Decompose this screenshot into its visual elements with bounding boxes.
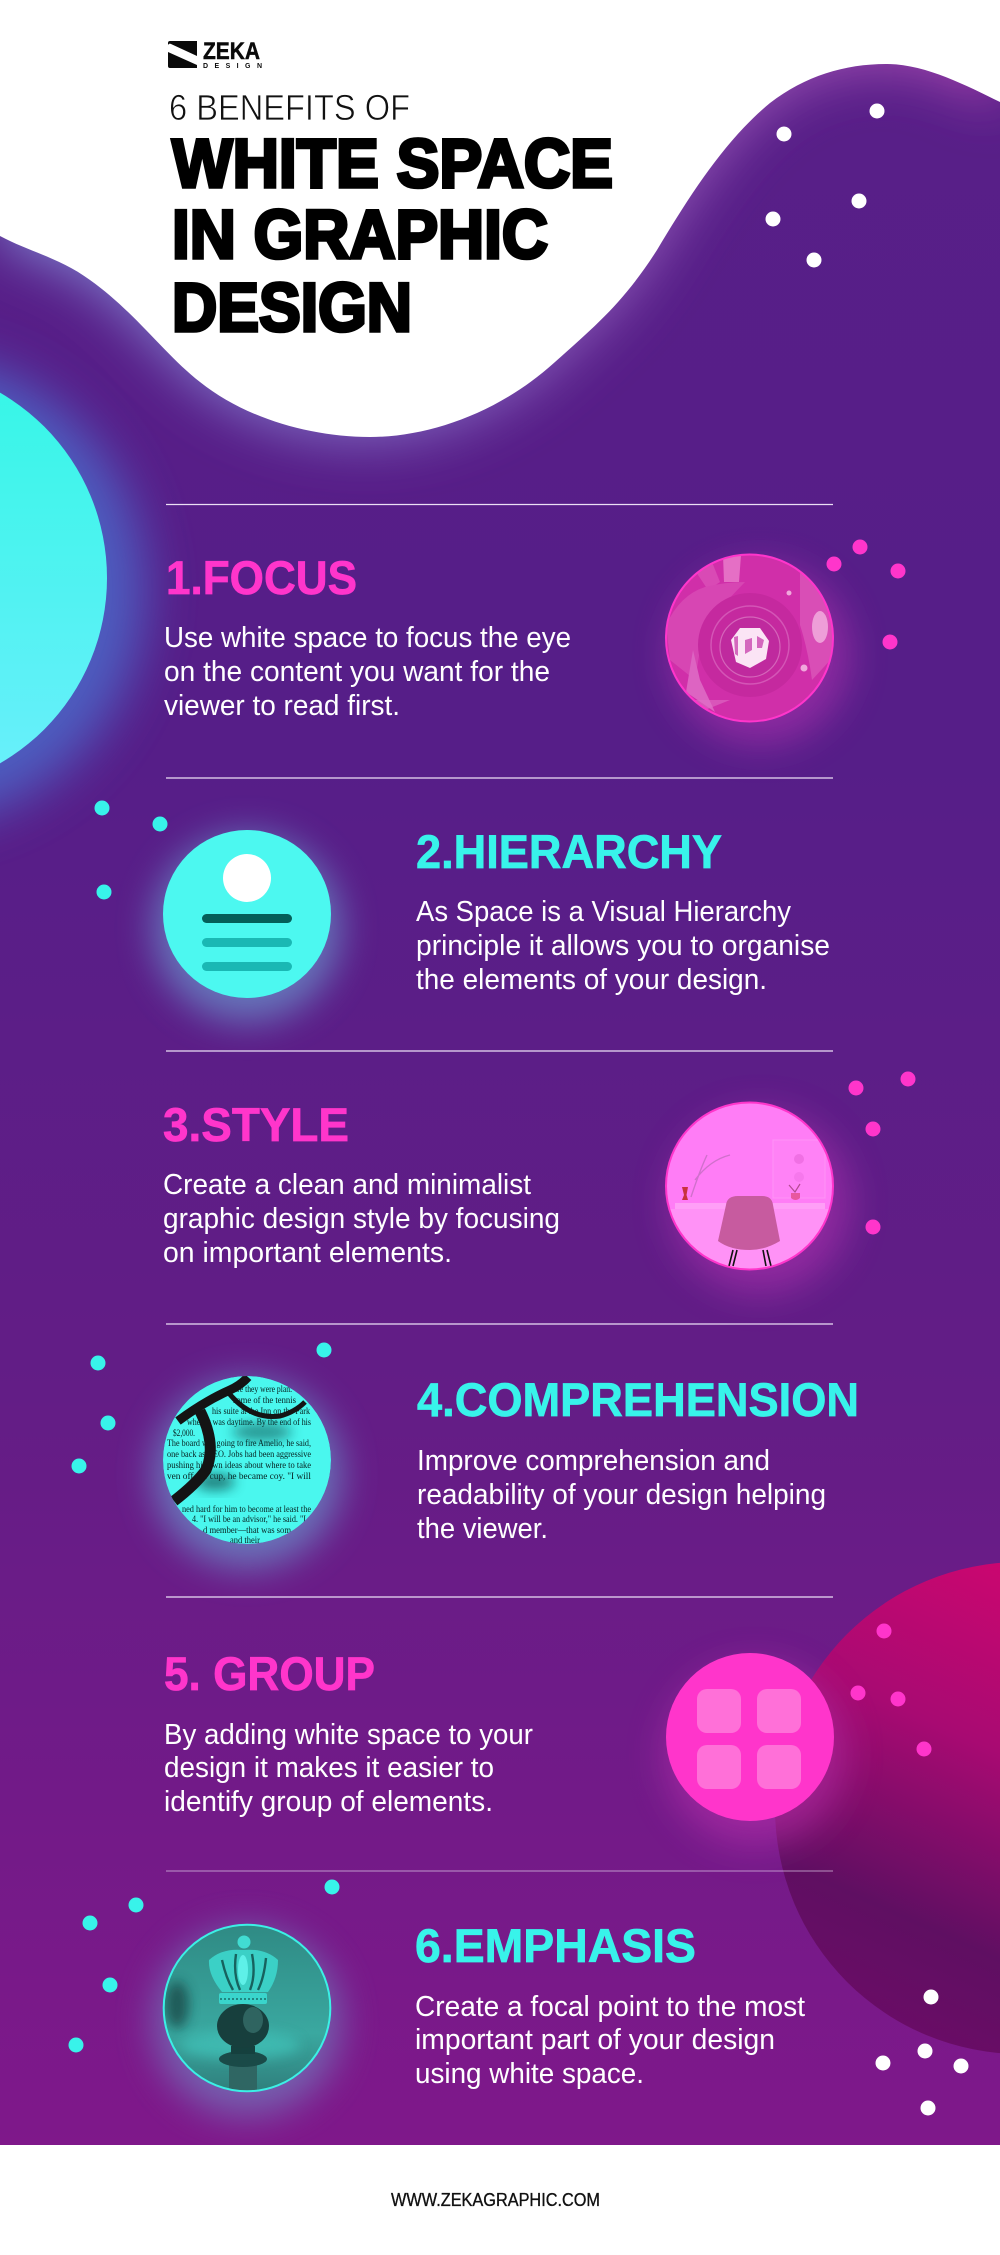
text: style description: Create a clean and minimalist [163, 1169, 531, 1201]
text: group description: By adding white space to your [164, 1719, 533, 1751]
icon: book and glasses photo: ven off the cup, he became coy. "I will [167, 1471, 312, 1481]
dots: pink 5 [850, 1624, 932, 1756]
icon: minimalist chair photo [665, 1102, 835, 1274]
text: emphasis description: important part of your design [415, 2024, 775, 2056]
text: focus description: Use white space to focus the eye [164, 622, 571, 654]
logo wordmark: ZEKA [203, 38, 260, 65]
icon: book and glasses photo: The board was going to fire Amelio, he said, [167, 1438, 311, 1448]
icon: book and glasses photo: $2,000. [173, 1428, 195, 1438]
title kicker: 6 BENEFITS OF [169, 87, 410, 128]
icon: grouped tiles [666, 1653, 834, 1821]
icon: book and glasses photo: when it was daytime. By the end of his [187, 1417, 311, 1427]
panel: 1 focus [164, 540, 906, 745]
icon ring: chair [666, 1102, 833, 1270]
dots: white bottom [876, 1990, 968, 2116]
text: emphasis description: using white space. [415, 2058, 644, 2090]
icon ring: lens [666, 554, 833, 722]
text: comprehension description: readability of your design helping [417, 1479, 826, 1511]
panel: 6 emphasis [68, 1880, 805, 2116]
text: style description: graphic design style by focusing [163, 1203, 560, 1235]
icon: book and glasses photo: and their [230, 1535, 260, 1545]
footer band [0, 2145, 1000, 2255]
title line 3: DESIGN [172, 269, 412, 346]
glow: group [665, 1665, 845, 1845]
panel: 3 style [163, 1072, 916, 1293]
text: style description [163, 1169, 560, 1269]
text: focus description: on the content you want for the [164, 656, 550, 688]
decorative cyan circle [0, 364, 107, 792]
title line 1: WHITE SPACE [172, 125, 613, 202]
text: focus description: viewer to read first. [164, 690, 400, 722]
text: comprehension description: Improve comprehension and [417, 1445, 770, 1477]
text: hierarchy description: the elements of your design. [416, 964, 767, 996]
glow: book [153, 1380, 341, 1568]
text: style description: on important elements. [163, 1237, 452, 1269]
icon: book and glasses photo: d member—that was som [203, 1525, 291, 1535]
heading: comprehension: 4.COMPREHENSION [417, 1373, 859, 1426]
text: emphasis description [415, 1991, 805, 2090]
glow: crown [153, 1928, 341, 2116]
dots: pink 1 [826, 540, 906, 650]
dots: white top [766, 104, 884, 268]
text: hierarchy description: As Space is a Visual Hierarchy [416, 896, 791, 928]
icon: book and glasses photo: some of the tennis [233, 1395, 296, 1405]
icon: book and glasses photo: one back as CEO. Jobs had been aggressive [167, 1449, 311, 1459]
footer url: WWW.ZEKAGRAPHIC.COM [391, 2190, 600, 2210]
decorative cyan circle glow [0, 355, 145, 825]
logo subtitle: DESIGN [203, 63, 262, 70]
logo [168, 38, 262, 70]
icon: content hierarchy [163, 830, 331, 998]
panel: 5 group [164, 1624, 932, 1845]
icon: book and glasses photo: pushing his own ideas about where to take [167, 1460, 311, 1470]
heading: emphasis: 6.EMPHASIS [415, 1919, 696, 1972]
panel: 2 hierarchy [94, 800, 830, 1022]
glow: hierarchy [153, 834, 341, 1022]
dividers [166, 504, 833, 1871]
icon: book and glasses photo: here they were plan. [230, 1384, 292, 1394]
glow: chair [670, 1113, 850, 1293]
text: comprehension description: the viewer. [417, 1513, 548, 1545]
heading: style: 3.STYLE [163, 1098, 349, 1151]
icon: book and glasses photo: ned hard for him to become at least the [182, 1504, 311, 1514]
heading: group: 5. GROUP [164, 1647, 375, 1700]
panel: 4 comprehension [72, 1342, 859, 1568]
text: hierarchy description: principle it allows you to organise [416, 930, 830, 962]
icon: book and glasses photo: his suite at the Inn on the Park [212, 1406, 310, 1416]
dots: cyan 6 [68, 1880, 340, 2052]
text: group description: design it makes it easier to [164, 1752, 494, 1784]
icon: book and glasses photo: 4. "I will be an advisor," he said. "I [192, 1514, 306, 1524]
text: group description: identify group of elements. [164, 1786, 493, 1818]
dots: pink 3 [848, 1072, 916, 1234]
icon: camera lens photo [666, 554, 835, 722]
white wave header shape [0, 0, 1000, 437]
icon: book and glasses photo [163, 1376, 331, 1545]
dots: cyan 4 [72, 1342, 332, 1474]
text: focus description [164, 622, 571, 722]
heading: focus: 1.FOCUS [166, 551, 357, 604]
decorative magenta circle [775, 1562, 1000, 2054]
icon: logo mark [168, 41, 197, 68]
text: comprehension description [417, 1445, 826, 1545]
dots: cyan 2 [94, 800, 168, 900]
title line 2: IN GRAPHIC [172, 196, 548, 273]
glow: lens [670, 565, 850, 745]
text: emphasis description: Create a focal point to the most [415, 1991, 805, 2023]
text: hierarchy description [416, 896, 830, 996]
wave glow [0, 6, 1000, 443]
icon ring: crown [164, 1925, 330, 2091]
title [169, 87, 613, 346]
heading: hierarchy: 2.HIERARCHY [416, 825, 722, 878]
icon: crown finial photo [163, 1924, 331, 2095]
text: group description [164, 1719, 533, 1818]
